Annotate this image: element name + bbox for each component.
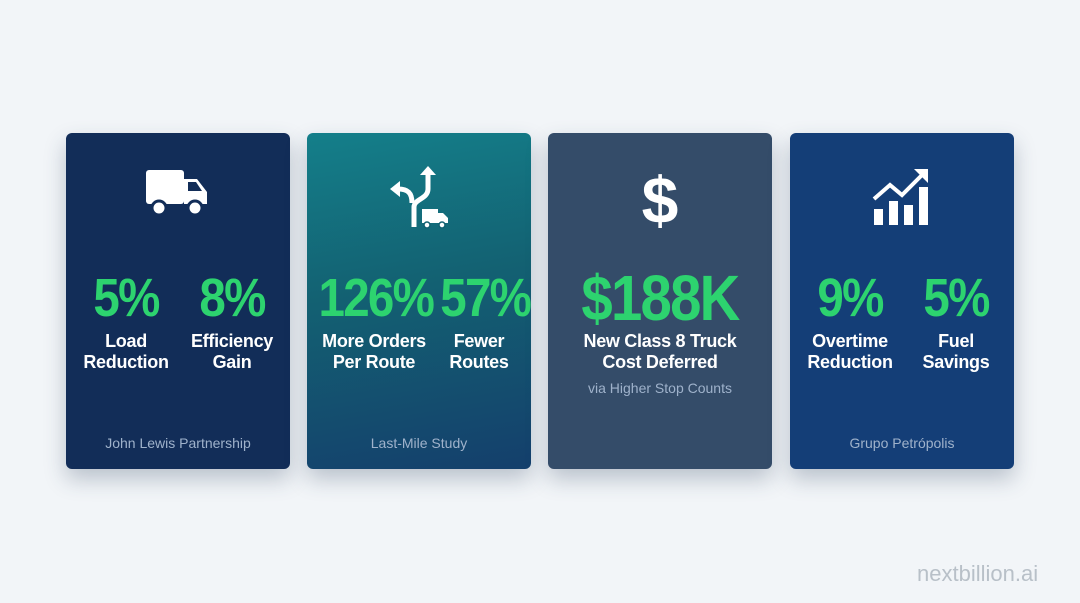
stat: $188K: New Class 8 Truck xyxy=(584,331,736,351)
subtext: via Higher Stop Counts xyxy=(588,380,732,396)
stat: 9% overtime xyxy=(807,268,893,372)
source: Last-Mile Study xyxy=(371,435,467,451)
stat: $188K: Cost Deferred xyxy=(602,352,718,372)
stat: 9% overtime: 9% xyxy=(817,268,883,328)
icon: growth chart xyxy=(872,169,928,225)
stat: 5% fuel: Savings xyxy=(923,352,989,372)
source: John Lewis Partnership xyxy=(105,435,251,451)
stat: 5% load reduction xyxy=(83,268,169,372)
stat: $188K xyxy=(581,262,740,372)
stat: 126% more orders: 126% xyxy=(319,268,433,328)
watermark: nextbillion.ai xyxy=(917,561,1038,586)
panel: Grupo Petrópolis xyxy=(790,133,1014,469)
stat: 57% fewer routes: 57% xyxy=(440,268,530,328)
icon: dollar: $ xyxy=(642,163,678,237)
stat: 126% more orders xyxy=(319,268,434,372)
panel: $188K xyxy=(548,133,772,469)
stat: 57% fewer routes: Fewer xyxy=(454,331,504,351)
stat: 57% fewer routes: Routes xyxy=(449,352,509,372)
stat: 5% load reduction: Reduction xyxy=(83,352,169,372)
stat: 126% more orders: Per Route xyxy=(333,352,415,372)
icon: routes xyxy=(390,166,448,228)
source: Grupo Petrópolis xyxy=(849,435,955,451)
stat: 8% efficiency gain: 8% xyxy=(199,268,265,328)
panel: Last-Mile Study xyxy=(307,133,531,469)
stat: $188K: $188K xyxy=(581,262,739,334)
icon: truck xyxy=(146,170,207,214)
panel: John Lewis Partnership xyxy=(66,133,290,469)
stat: 5% fuel xyxy=(923,268,990,372)
stat: 9% overtime: Reduction xyxy=(807,352,893,372)
stat: 5% load reduction: Load xyxy=(105,331,147,351)
stat: 5% fuel: 5% xyxy=(923,268,989,328)
stat: 8% efficiency gain xyxy=(191,268,274,372)
stat: 8% efficiency gain: Gain xyxy=(213,352,251,372)
stat: 5% fuel: Fuel xyxy=(938,331,974,351)
stat: 5% load reduction: 5% xyxy=(93,268,159,328)
stat: 126% more orders: More Orders xyxy=(322,331,426,351)
stat: 57% fewer routes xyxy=(440,268,531,372)
stat: 9% overtime: Overtime xyxy=(812,331,888,351)
stat: 8% efficiency gain: Efficiency xyxy=(191,331,273,351)
